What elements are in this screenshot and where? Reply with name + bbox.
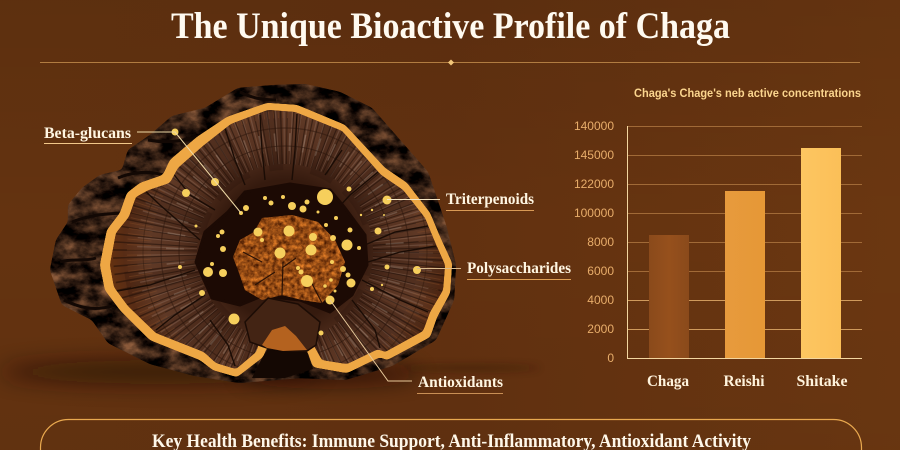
category labels: Chaga [647, 373, 689, 390]
bar: Reishi [725, 191, 765, 358]
bar chart [574, 88, 862, 390]
y axis labels: 6000 [587, 264, 614, 278]
y axis labels: 2000 [587, 322, 614, 336]
bottom notch shadow [252, 349, 313, 378]
callout: Antioxidants: Antioxidants [418, 374, 503, 391]
callout: Antioxidants [330, 300, 503, 394]
bioactive dots [172, 128, 421, 336]
bar: Shitake [801, 148, 841, 358]
title: The Unique Bioactive Profile of Chaga [171, 6, 730, 47]
bar: Chaga [649, 235, 689, 358]
radial grain rings [163, 130, 407, 374]
y axis labels: 100000 [574, 206, 614, 220]
cap interior [110, 110, 445, 369]
y axis labels: 0 [607, 351, 614, 365]
y axis labels: 8000 [587, 235, 614, 249]
chart title: Chaga's Chage's neb active concentrations [634, 88, 861, 100]
callout: Polysaccharides: Polysaccharides [467, 260, 571, 277]
category labels: Shitake [796, 373, 848, 390]
y axis labels: 140000 [574, 119, 614, 133]
orange core [233, 215, 345, 303]
callout: Beta-glucans: Beta-glucans [44, 125, 131, 142]
dark center [196, 184, 367, 312]
callout: Beta-glucans [44, 125, 241, 213]
benefits panel [40, 420, 862, 450]
y axis labels [574, 119, 614, 365]
category labels [647, 373, 848, 390]
lower orange patch [262, 326, 307, 351]
cracks [112, 114, 436, 366]
bottom lobe [245, 298, 320, 351]
outer bark [50, 84, 456, 383]
y axis labels: 4000 [587, 293, 614, 307]
y axis labels: 122000 [574, 177, 614, 191]
illustration: chaga cross-section [0, 84, 540, 398]
category labels: Reishi [724, 373, 765, 390]
orange rim [100, 103, 452, 377]
y axis labels: 145000 [574, 148, 614, 162]
callout: Triterpenoids: Triterpenoids [446, 191, 534, 208]
